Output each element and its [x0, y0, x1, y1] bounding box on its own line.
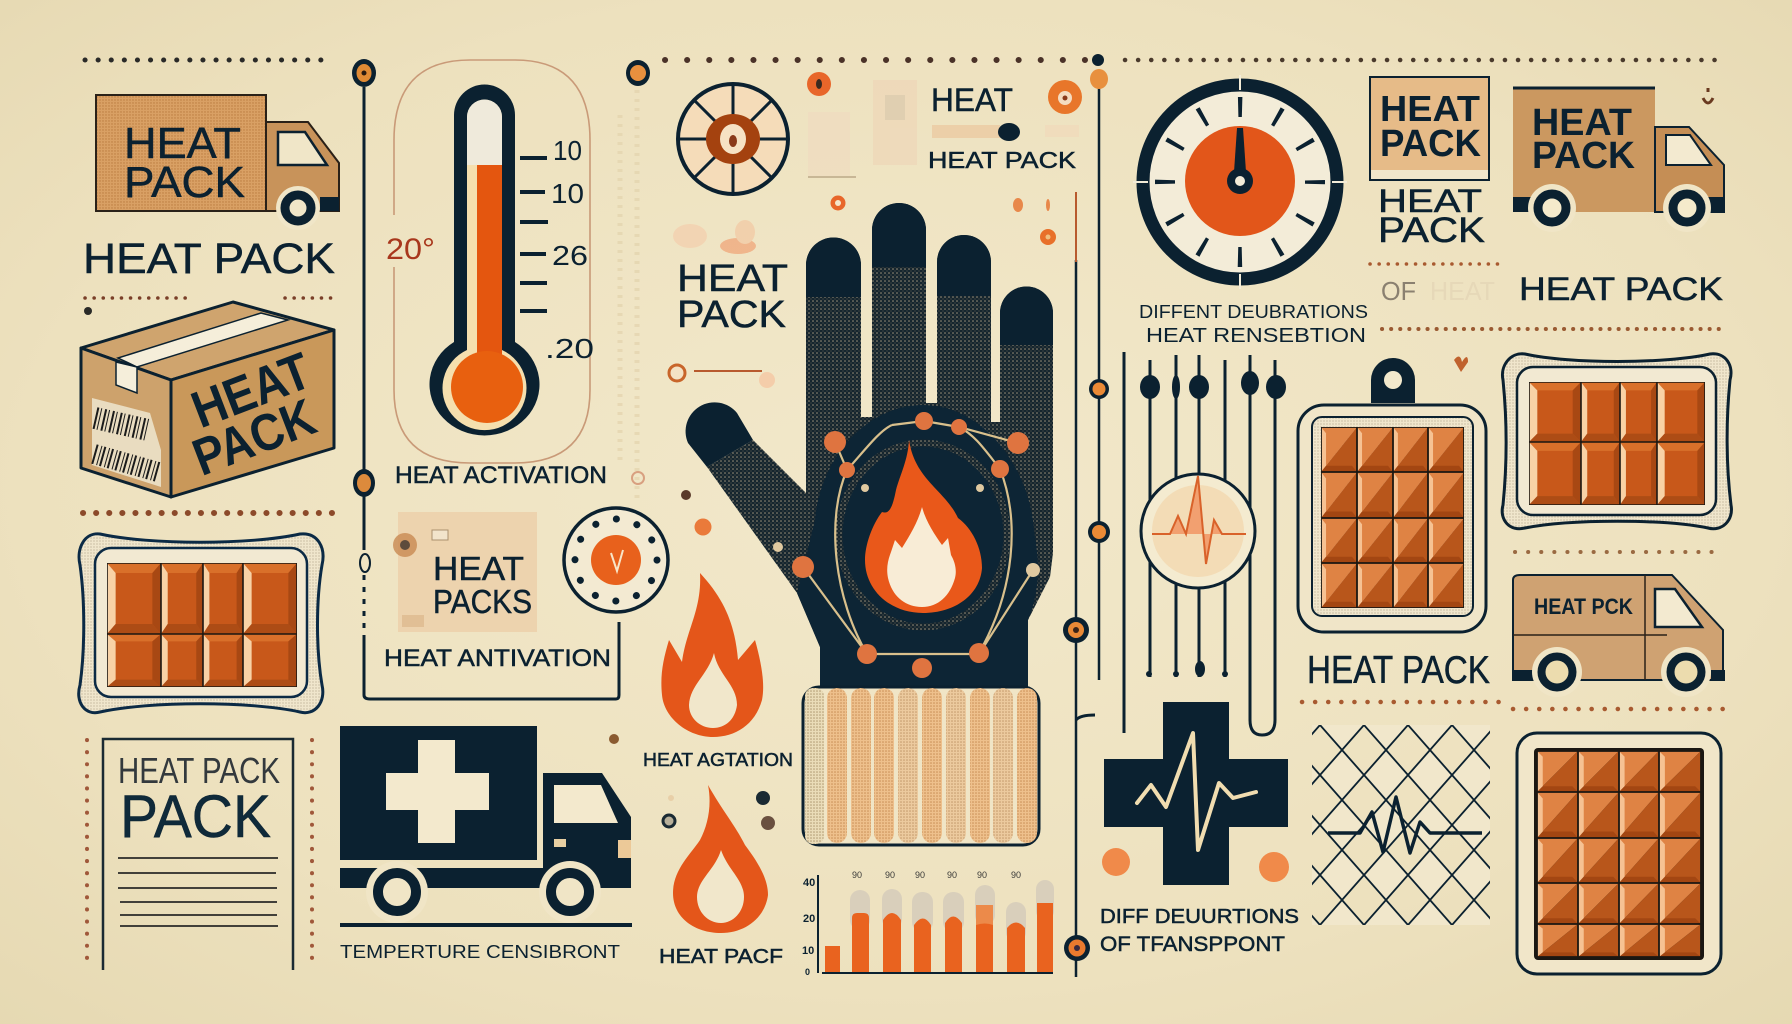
wheel front [1663, 184, 1711, 232]
hook mark [1703, 88, 1713, 103]
outer frame [1298, 405, 1486, 632]
tiles [1321, 427, 1464, 608]
tiles [1537, 751, 1701, 957]
top labels: 90 [977, 870, 987, 880]
cargo label: HEAT [124, 119, 241, 168]
faded orange smear [673, 220, 756, 254]
central flame [865, 440, 982, 613]
wheel front [539, 861, 601, 923]
headlight [618, 840, 631, 858]
top labels: 90 [1011, 870, 1021, 880]
outer frame [1517, 733, 1721, 974]
pulse [1328, 797, 1482, 853]
cab [1655, 127, 1724, 212]
card [398, 512, 537, 632]
cargo [1513, 87, 1655, 212]
scale 26: 26 [552, 240, 588, 271]
cargo [340, 726, 537, 860]
thumb mesh [707, 440, 830, 640]
hour ticks [1165, 107, 1315, 257]
dotted rule: left 2 [83, 510, 332, 516]
medical truck [340, 726, 632, 927]
orange blob [1102, 848, 1130, 876]
heading: heat: HEAT [677, 258, 788, 300]
node [1090, 69, 1108, 89]
bead [360, 554, 370, 572]
chassis [340, 868, 631, 888]
panel: heat packs card [393, 512, 537, 632]
inner seam [1517, 367, 1716, 515]
red temperature label: 20° [386, 233, 435, 266]
flecks [1013, 198, 1050, 212]
caption: heat antivation: HEAT ANTIVATION [384, 645, 611, 672]
wheel rear [1528, 184, 1576, 232]
orange ring [807, 72, 831, 96]
cargo label second line: PACK [124, 158, 245, 207]
node [1064, 935, 1090, 961]
node [1089, 379, 1109, 399]
quilted border [1502, 354, 1731, 529]
label: HEAT [1380, 88, 1480, 129]
timeline center right [1088, 54, 1110, 680]
orange face [1185, 126, 1295, 236]
mercury column [477, 165, 502, 365]
hanger hole [1384, 371, 1402, 389]
cab [266, 122, 339, 211]
little finger [1000, 286, 1053, 440]
dotted rule: right 4 [1302, 700, 1500, 704]
heading: heat pack: HEAT PACK [928, 147, 1077, 173]
window [554, 785, 618, 823]
ring finger [937, 235, 991, 430]
flame core [887, 507, 956, 607]
big clock [1133, 75, 1347, 289]
small dots [632, 472, 712, 536]
dotted rule: left 1 [85, 296, 335, 300]
node [1063, 617, 1089, 643]
text lines [118, 858, 278, 926]
truck top right [1513, 87, 1724, 232]
faded device [393, 530, 448, 627]
heat pad left [79, 534, 323, 713]
dots near flame [663, 791, 775, 830]
box left face [81, 348, 171, 497]
document large word: PACK [120, 783, 271, 850]
inner seam [95, 548, 307, 697]
ring tip [937, 235, 991, 296]
orange ring accent [830, 196, 846, 210]
heading: heat pack: HEAT PACK [1307, 649, 1490, 692]
door handle [554, 839, 566, 847]
cargo box [96, 95, 266, 211]
dotted rule: top center [665, 57, 1095, 63]
top edge [1513, 86, 1655, 90]
title: HEAT [433, 550, 524, 587]
cardboard box [81, 302, 334, 497]
truck label second line: PACK [1532, 135, 1636, 177]
node [353, 469, 375, 497]
middle finger [872, 203, 926, 430]
dot column left [85, 740, 89, 968]
faded vertical strips [620, 90, 637, 500]
window [1655, 589, 1702, 627]
inner frame [1312, 417, 1473, 616]
wheel rear [366, 861, 428, 923]
axis label: 0 [805, 967, 810, 977]
branch [1076, 715, 1095, 720]
inner mesh ring [839, 443, 1007, 627]
orange blob [1259, 852, 1289, 882]
box label second line: PACK [185, 388, 324, 488]
dotted rule: top right [1125, 58, 1720, 62]
flame middle core [689, 653, 737, 728]
hand [1234, 128, 1246, 172]
hub [706, 114, 760, 164]
dotted rule: right 3 [1515, 550, 1722, 554]
plain heat: HEAT [1378, 183, 1482, 219]
little tip [1000, 286, 1053, 345]
bulb [451, 351, 523, 423]
navy cap [1092, 54, 1104, 66]
index tip [806, 237, 861, 297]
tiles [107, 563, 297, 687]
heat pad right [1502, 354, 1731, 529]
hanger [1371, 358, 1415, 403]
ground line [340, 923, 632, 927]
palm dark center [797, 405, 1038, 690]
glove [686, 203, 1053, 690]
quilted border [79, 534, 323, 713]
cuff [803, 687, 1039, 845]
tan fill [1371, 78, 1488, 170]
small dial [564, 508, 668, 612]
body lines [1513, 575, 1667, 680]
heat pack box label [1370, 77, 1489, 180]
diamond lattice [1312, 725, 1490, 925]
heading: faded heat: HEAT [1430, 276, 1495, 306]
scale 10: 10 [551, 178, 584, 209]
node [1088, 521, 1110, 543]
panel: thermometer [394, 60, 590, 463]
caption: DIFFENT DEUBRATIONS [1139, 302, 1368, 322]
caption: heat activation: HEAT ACTIVATION [395, 462, 607, 489]
caption: temperature: TEMPERTURE CENSIBRONT [340, 942, 620, 962]
dot column right [310, 740, 314, 968]
axis labels: 40 [803, 877, 815, 889]
tube [430, 85, 540, 435]
page outline [103, 739, 293, 970]
faded icons [808, 80, 917, 178]
empty top [467, 100, 502, 165]
ribs [805, 688, 1037, 844]
document [87, 739, 312, 970]
caption: heat pacf: HEAT PACF [659, 946, 783, 968]
cross [386, 740, 489, 843]
card title second line: PACKS [433, 583, 532, 620]
body [1513, 575, 1723, 680]
slider [932, 123, 1079, 141]
box top [81, 302, 334, 380]
hub [1227, 168, 1253, 194]
timeline center left [1063, 192, 1090, 977]
tiles [1529, 382, 1705, 505]
middle tip [872, 203, 926, 267]
reddish top segment [1075, 192, 1077, 262]
pulse [1152, 476, 1246, 564]
wheel front [1661, 647, 1711, 697]
index finger [806, 237, 861, 430]
palm [797, 403, 1053, 690]
bumpers [1513, 670, 1725, 681]
ring gaps [1133, 75, 1347, 289]
label: HEAT PCK [1534, 594, 1633, 619]
circuit lines [1076, 352, 1286, 735]
small dot [84, 307, 92, 315]
flame lower [673, 785, 768, 933]
orange ring accent [1040, 229, 1056, 245]
small heart [1454, 356, 1468, 372]
heading: heat pack: HEAT PACK [1519, 271, 1723, 307]
node [626, 60, 650, 86]
top labels: 90 [852, 870, 862, 880]
barcode label [92, 398, 161, 487]
nodes [1140, 371, 1286, 677]
node [352, 59, 376, 87]
cab window [278, 132, 327, 165]
pulse dial [1141, 474, 1255, 588]
cab [543, 773, 631, 888]
top labels: 90 [915, 870, 925, 880]
axes [818, 875, 1053, 973]
bar chart [803, 875, 1054, 973]
orange ring right [1048, 80, 1082, 114]
flame middle [661, 573, 763, 737]
tape flap [116, 362, 137, 393]
label: HEAT [1532, 102, 1632, 144]
pale caps [850, 880, 1054, 942]
dotted rule: right 2 [1382, 327, 1722, 331]
pale nodes [773, 484, 1040, 577]
bars [825, 903, 1053, 972]
top labels: 90 [947, 870, 957, 880]
tan circuit lines [803, 421, 1033, 654]
heading: of: OF [1381, 276, 1416, 306]
brown dot [609, 734, 619, 744]
axis label: 20 [803, 913, 815, 925]
heading: heat: HEAT [931, 82, 1013, 118]
thumb tip [686, 402, 753, 467]
caption: DIFF DEUURTIONS [1100, 906, 1299, 928]
small connector [669, 365, 775, 388]
wheel [276, 186, 320, 230]
wheel rear [1532, 647, 1582, 697]
glass interior [443, 100, 527, 430]
frame [394, 60, 590, 463]
box label: HEAT [184, 342, 319, 440]
dotted rule: right 5 [1513, 707, 1725, 711]
pulse line [1137, 733, 1256, 850]
dotted rule: top left [85, 58, 328, 62]
timeline left [352, 59, 619, 699]
flame center [591, 535, 641, 585]
delivery van [1513, 575, 1725, 697]
ticks [520, 158, 548, 311]
heading: pack: PACK [677, 294, 786, 336]
caption: heat agtation: HEAT AGTATION [643, 750, 793, 770]
plain pack: PACK [1378, 211, 1485, 250]
scale 10: 10 [553, 135, 582, 166]
bumper [320, 197, 339, 211]
circuit nodes [792, 412, 1029, 678]
undercarriage [1513, 197, 1724, 212]
truck with heat pack cargo [96, 95, 339, 230]
label second line: PACK [1380, 123, 1482, 165]
box right face [171, 330, 334, 497]
wheel icon [678, 84, 788, 194]
axis label: 10 [802, 945, 814, 957]
window [1666, 135, 1711, 165]
heat pad middle [1298, 358, 1486, 632]
caption: OF TFANSPPONT [1100, 933, 1285, 956]
heading: heat pack: HEAT PACK [83, 235, 335, 283]
caption: HEAT RENSEBTION [1146, 325, 1366, 347]
top labels: 90 [885, 870, 895, 880]
flame lower core [697, 850, 744, 923]
heat pad bottom right [1517, 733, 1721, 974]
scale 20: .20 [545, 333, 594, 364]
dotted rule: right 1 [1370, 262, 1500, 266]
packing tape [118, 313, 288, 367]
medical cross [1104, 702, 1288, 885]
tile tray [1534, 748, 1704, 960]
heading: HEAT PACK [118, 750, 280, 791]
